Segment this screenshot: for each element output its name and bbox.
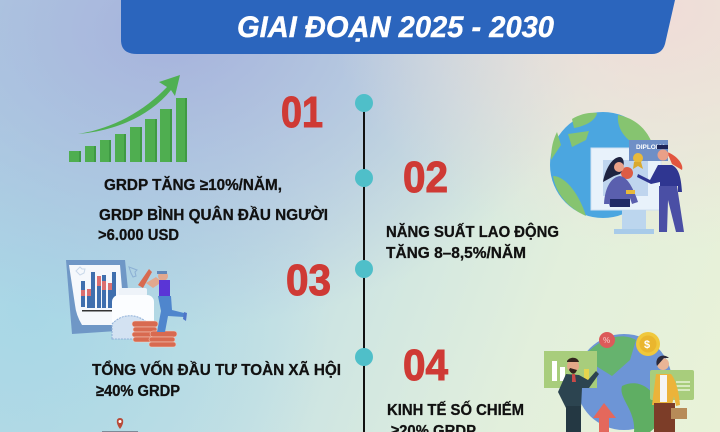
text: digital economy: KINH TẾ SỐ CHIẾM [387,399,524,419]
icon: globe and business people: % [603,336,610,345]
number 04: 04 [403,341,448,390]
text: GRDP targets: GRDP BÌNH QUÂN ĐẦU NGƯỜI [99,205,328,224]
text: GRDP targets: >6.000 USD [98,227,179,244]
number 02: 02 [403,153,448,202]
text: social investment: ≥40% GRDP [96,383,180,400]
number 01: 01 [281,88,323,137]
title banner [121,0,675,54]
title: GIAI ĐOẠN 2025 - 2030 [237,11,554,44]
icon: green growth bars and arrow [69,75,187,162]
text: social investment: TỔNG VỐN ĐẦU TƯ TOÀN XÃ HỘI [92,359,341,379]
text: digital economy [387,399,524,432]
icon: globe and business people [544,332,694,432]
text: labour productivity: TĂNG 8–8,5%/NĂM [386,243,526,262]
icon: map pin [102,418,138,432]
text: social investment [92,359,341,400]
icon: globe and diploma [550,112,684,234]
text: labour productivity: NĂNG SUẤT LAO ĐỘNG [386,222,559,241]
icon: globe and diploma: DIPLOMA [636,144,666,151]
text: GRDP targets [98,175,328,244]
icon: investment chart, jar and coins [66,260,187,347]
number 03: 03 [286,256,331,305]
text: labour productivity [386,222,559,262]
timeline [355,94,373,432]
text: GRDP targets: GRDP TĂNG ≥10%/NĂM, [104,175,282,194]
icon: globe and business people: $ [644,339,650,351]
